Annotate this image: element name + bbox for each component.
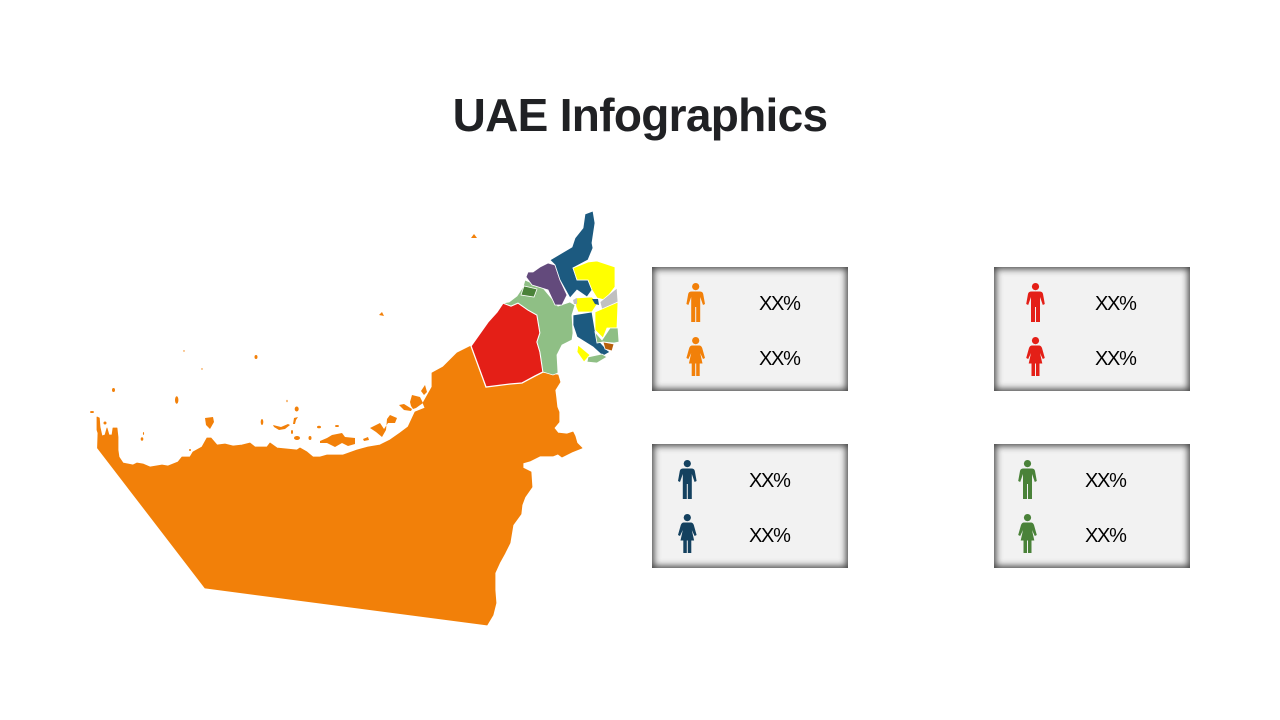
title: UAE Infographics [453,89,827,141]
text: value: XX% [759,348,801,370]
icon: male figure [686,283,705,322]
region: Ras Al Khaimah (blue) [550,211,595,298]
region: brown enclave [603,342,614,351]
region: yellow south [577,345,590,362]
text: value: XX% [1085,470,1127,492]
region: light green south [587,354,607,363]
icon: male figure [678,460,697,499]
region: yellow east [595,302,618,338]
icon: male figure [1018,460,1037,499]
region: yellow centre [575,297,598,312]
text: value: XX% [1095,293,1137,315]
region: Abu Dhabi mainland [90,234,582,625]
text: value: XX% [1085,525,1127,547]
region: blue sliver [592,299,599,305]
region: Dubai (light green) [503,280,575,375]
region: Al Ain (red) [471,303,543,387]
text: value: XX% [1095,348,1137,370]
region: blue south [573,312,610,356]
region: grey small [573,298,577,304]
region: light green east [595,328,619,343]
panel: orange statistics [652,267,848,391]
panel: blue statistics [652,444,848,568]
region: dark green enclave [521,286,537,297]
island: small islet [379,312,384,316]
island: northern islet [471,234,477,238]
icon: female figure [1026,337,1045,376]
icon: male figure [1026,283,1045,322]
icon: female figure [678,514,697,553]
text: value: XX% [749,525,791,547]
panel: green statistics [994,444,1190,568]
region: grey [600,288,618,310]
region: Sharjah (purple) [526,263,567,305]
text: value: XX% [759,293,801,315]
icon: female figure [686,337,705,376]
panel: red statistics [994,267,1190,391]
icon: female figure [1018,514,1037,553]
text: value: XX% [749,470,791,492]
region: Fujairah north (yellow) [573,261,615,300]
